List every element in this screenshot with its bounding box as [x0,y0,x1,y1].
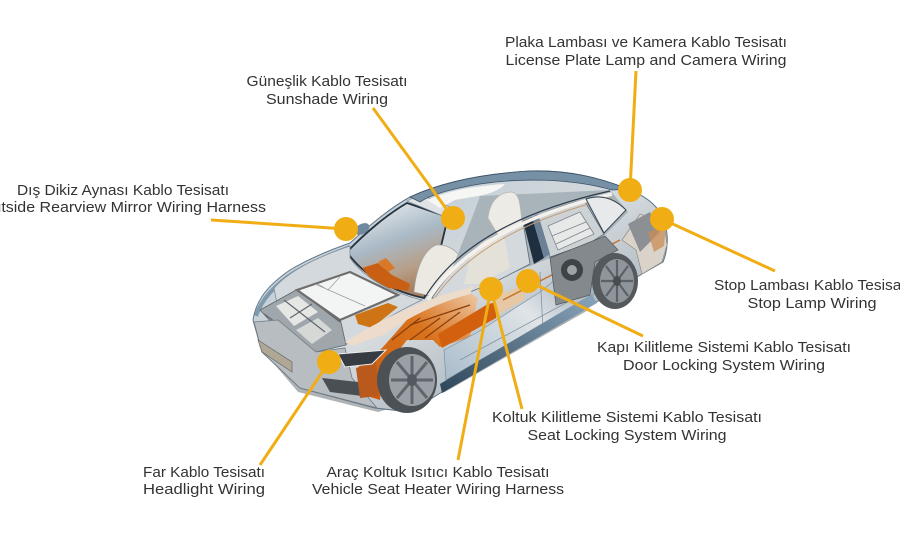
callout: seat locking wiring [491,289,762,444]
engine bay [260,289,346,352]
callout: plate lamp wiring: License Plate Lamp and Camera Wiring [506,53,786,69]
roof frame [410,171,628,202]
rear end [622,212,667,274]
rear wheel [592,253,638,309]
front wheel [377,347,437,413]
rear seat [488,192,522,238]
callout: stop lamp wiring: Stop Lambası Kablo Tesisatı [714,278,900,294]
wiring hatch on fender [392,305,470,340]
car body [253,171,667,412]
front seat [414,245,460,296]
front door glass [432,222,530,300]
cargo equipment [548,212,594,250]
center pillar [523,217,544,264]
tan box in door [496,284,526,316]
windshield [347,203,448,298]
callout: sunshade wiring: Güneşlik Kablo Tesisatı [246,74,408,90]
callout: stop lamp wiring [650,207,900,312]
hood [274,246,422,345]
orange sill battery box [438,302,498,348]
callout: door locking wiring [516,269,851,374]
sill stripe [440,294,597,393]
hood edge strip [256,247,350,316]
callout: plate lamp wiring [505,35,787,202]
interior orange wiring under windshield [362,258,410,291]
car shadow [258,308,592,412]
callout: outside mirror wiring [0,183,358,241]
grille [258,340,292,372]
lower intake [322,378,362,396]
callout: door locking wiring: Door Locking System Wiring [623,358,825,374]
interior behind roof [440,190,628,300]
battery [297,272,398,320]
car illustration [253,171,667,413]
callout: stop lamp wiring: Stop Lamp Wiring [748,296,876,312]
callout: seat heater wiring: Araç Koltuk Isıtıcı Kablo Tesisatı [326,465,550,481]
callout: sunshade wiring [246,74,465,230]
orange wiring: fender and dash [357,293,478,400]
callout: outside mirror wiring: Dış Dikiz Aynası Kablo Tesisatı [17,183,229,199]
sunroof opening [427,184,505,208]
callout: seat heater wiring: Vehicle Seat Heater Wiring Harness [312,482,564,498]
rear quarter gear [550,236,618,305]
orange wiring: hood edge [355,303,398,328]
callout: seat locking wiring: Seat Locking System Wiring [528,428,726,444]
lower door [444,240,606,380]
header bar [407,196,462,218]
seat in door [464,237,510,284]
front bumper [254,320,377,408]
callout: headlight wiring [143,350,341,498]
callout: seat heater wiring [312,277,564,498]
callout: headlight wiring: Far Kablo Tesisatı [143,465,265,481]
rear side window and cargo [537,200,604,257]
belt wire [503,240,620,300]
headlight [338,350,386,367]
rear quarter glass [586,197,626,233]
callout: seat locking wiring: Koltuk Kilitleme Sistemi Kablo Tesisatı [492,410,762,426]
callout: sunshade wiring: Sunshade Wiring [266,92,388,108]
mirror [353,221,371,237]
orange wiring: lower corner [356,362,378,398]
callout: door locking wiring: Kapı Kilitleme Sistemi Kablo Tesisatı [597,340,851,356]
callout: headlight wiring: Headlight Wiring [143,482,265,498]
callout: plate lamp wiring: Plaka Lambası ve Kamera Kablo Tesisatı [505,35,787,51]
door seams [460,272,590,360]
roof rail [428,194,612,300]
fender highlight [345,286,474,346]
